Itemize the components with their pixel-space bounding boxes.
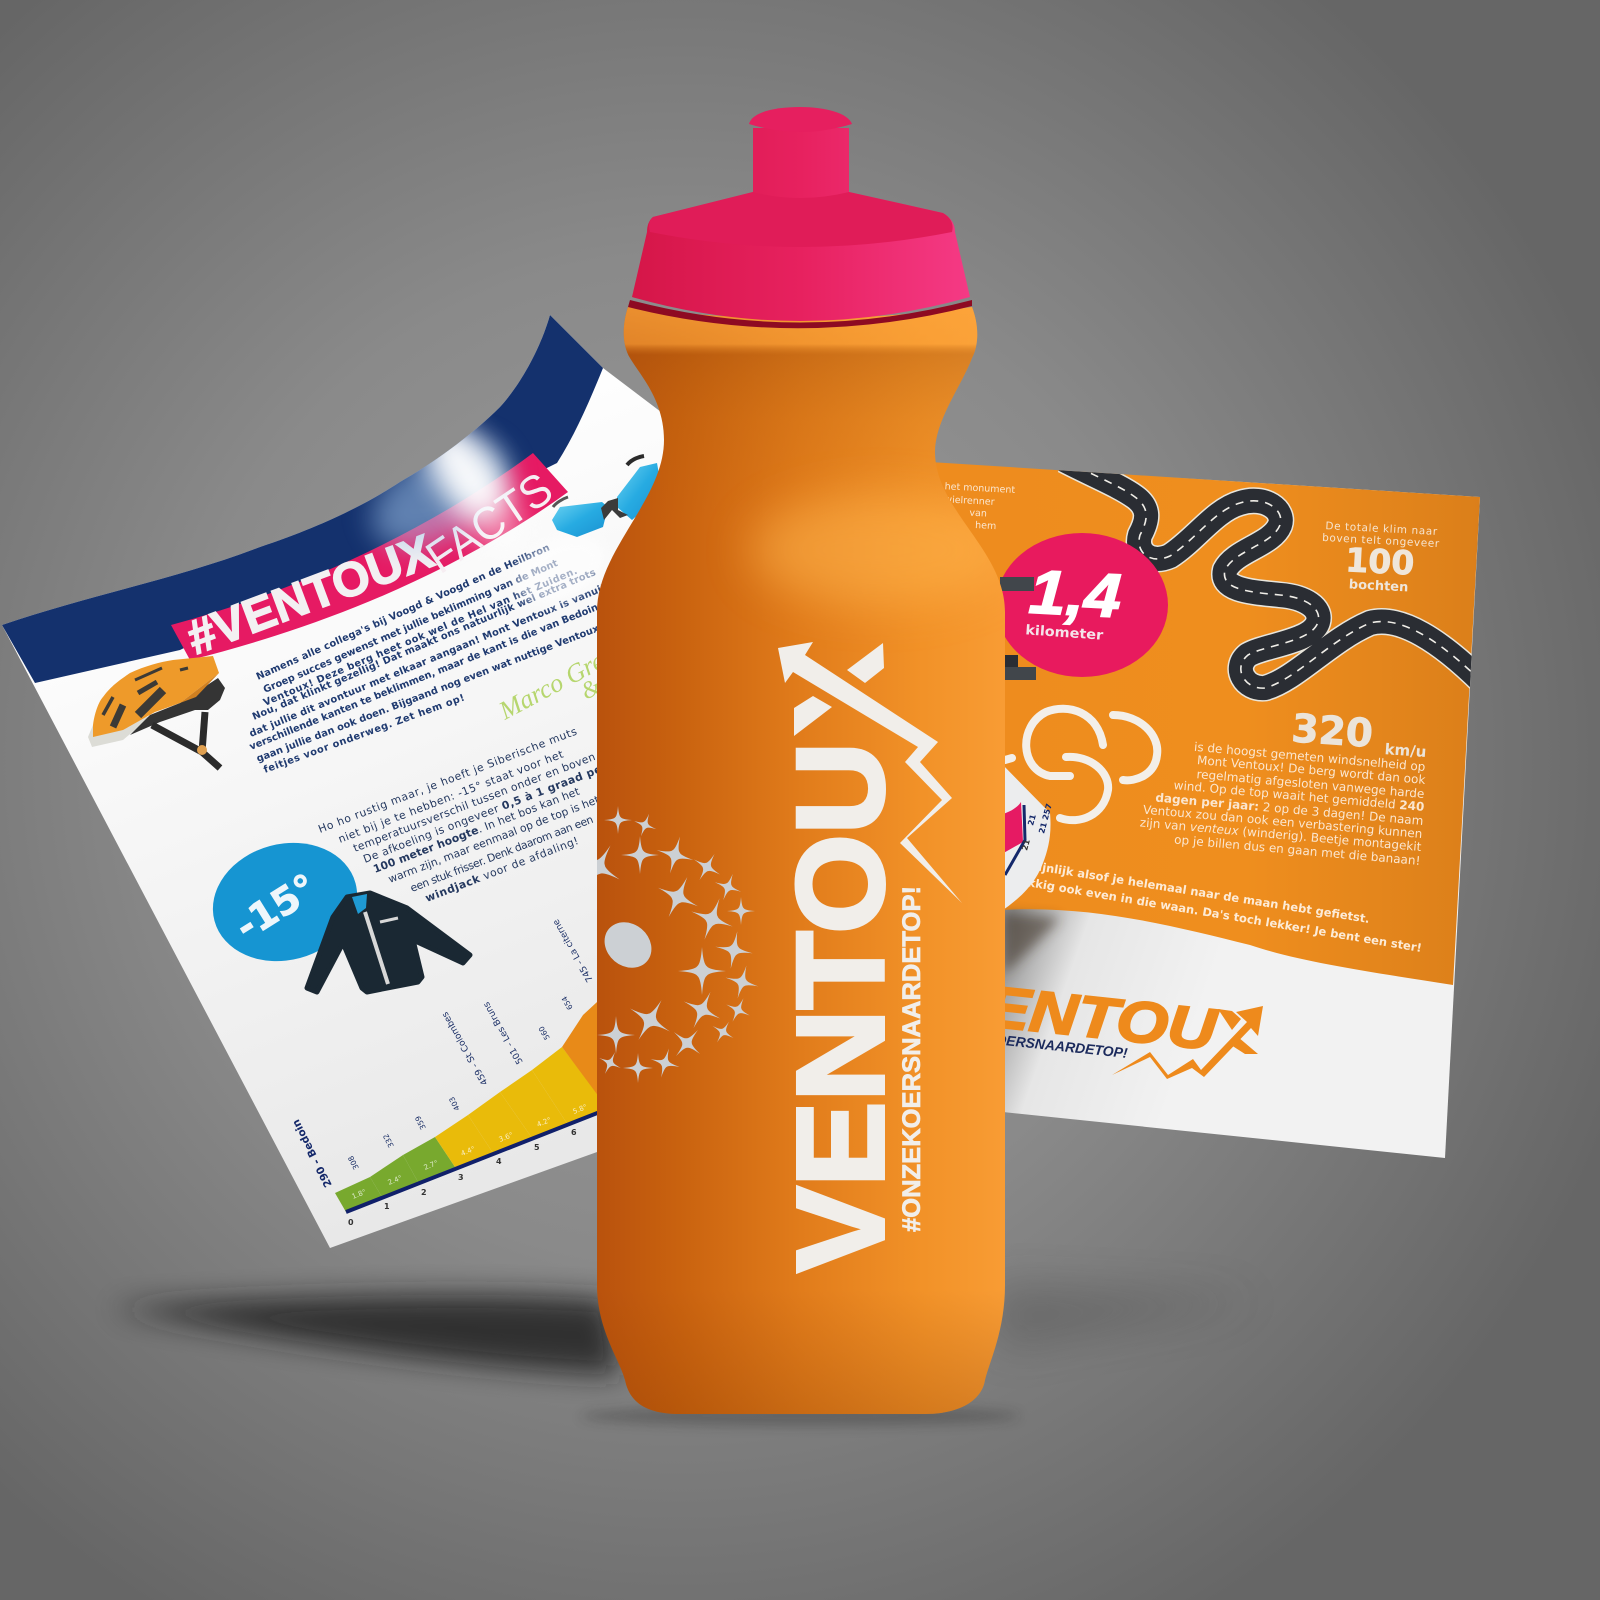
bottle shading (590, 300, 1010, 1420)
intro text: dat jullie dit avontuur met elkaar aangaan! Mont Ventoux is vanuit (248, 582, 608, 740)
ground shadow (110, 1285, 1260, 1426)
intro text: Ventoux! Deze berg heet ook wel de Hel van het Zuiden. (262, 566, 579, 709)
cap: base (632, 192, 970, 321)
closing lines: En gelukkig ook even in die waan. Da's toch lekker! Je bent een ster! (979, 867, 1423, 955)
cap: under shadow (628, 300, 972, 328)
wind speed block (1139, 706, 1427, 868)
top left text (942, 481, 1016, 533)
icon: helmet (88, 656, 225, 768)
temperature text: De afkoeling is ongeveer 0,5 à 1 graad per (361, 760, 609, 866)
navy band (2, 315, 603, 683)
wind speed block: regelmatig afgesloten vanwege harde (1196, 767, 1425, 801)
100 bochten text (1319, 520, 1441, 597)
closing lines (922, 841, 1423, 955)
elevation labels: 290 - Bedoin (290, 1117, 335, 1189)
blue circle -15°: -15° (227, 865, 325, 949)
sheet paper (2, 315, 720, 1248)
icon: wind spirals (1005, 709, 1157, 820)
orange area (930, 462, 1480, 985)
band and banner glare (358, 418, 538, 564)
chart: elevation profile: 4 (496, 1157, 502, 1166)
icon: jacket (307, 893, 470, 992)
blue circle -15° (199, 827, 371, 977)
wind speed block: 320 (1290, 706, 1374, 757)
bottle logo: X with arrow and mountain line (778, 642, 962, 903)
100 bochten text: 100 (1344, 540, 1415, 583)
chart: elevation profile: 6 (571, 1128, 577, 1137)
curled corner of sheet seen at right of bottle: 21 257 (1037, 803, 1054, 835)
chart: elevation profile: 359 (413, 1114, 428, 1131)
cap: tip (749, 107, 852, 132)
cap: top face (649, 192, 953, 247)
wind speed block: op je billen dus en gaan met die banaan! (1174, 833, 1421, 868)
intro text: Nou, dat klinkt gezellig! Dat maakt ons natuurlijk wel extra trots (251, 567, 598, 723)
100 bochten text: De totale klim naar (1325, 520, 1438, 538)
closing lines: Het voelt waarschijnlijk alsof je helemaal naar de maan hebt gefietst. (922, 841, 1371, 926)
top left text: wielrenner (944, 494, 995, 508)
chart: elevation profile: 1 (384, 1202, 390, 1211)
chart: elevation profile: 5.8° (572, 1103, 588, 1116)
heading banner: FACTS (417, 462, 562, 583)
wind speed block: Ventoux zou dan ook een verbastering kunnen (1142, 803, 1423, 841)
top left text: hem (975, 520, 997, 532)
bottle logo: VENTOU wordmark: VENTOU (773, 742, 910, 1272)
bottle (564, 107, 1010, 1420)
curled corner of sheet seen at right of bottle: 21 (1026, 813, 1038, 827)
chart: elevation profile: 4.2° (536, 1116, 552, 1129)
chart: elevation profile: 501 - Les Bruns (482, 1000, 526, 1066)
temperature text: Ho ho rustig maar, je hoeft je Siberische muts (316, 725, 579, 836)
intro text: gaan jullie dan ook doen. Bijgaand nog even wat nuttige Ventoux- (255, 622, 604, 765)
temperature text (316, 725, 609, 905)
chart: elevation profile: 2 (421, 1188, 427, 1197)
signature: & (577, 673, 606, 705)
signature: Marco Gre (493, 646, 609, 726)
chart: elevation profile: 403 (447, 1095, 462, 1112)
panel: right sheet (orange) (922, 460, 1485, 1158)
heading banner: #VENTOUX (180, 525, 441, 665)
chart: elevation profile: 2.7° (423, 1159, 439, 1172)
baseline (346, 1108, 610, 1212)
pink circle 1,4 kilometer (996, 533, 1168, 680)
pink circle 1,4 kilometer: kilometer (1025, 622, 1104, 644)
chart: elevation profile: 745 - La citerne (551, 917, 596, 984)
curled corner of sheet seen at right of bottle (1000, 762, 1054, 912)
intro text: Groep succes gewenst met jullie beklimming van de Mont (262, 558, 560, 696)
chart: elevation profile: 332 (381, 1132, 396, 1149)
shadow of curl (1003, 912, 1060, 975)
orange logo: VENTOU (939, 969, 1221, 1063)
chart: elevation profile: 2.4° (387, 1174, 403, 1187)
chart: elevation profile: 459 - St Colombes (440, 1010, 491, 1086)
top left text: het monument (944, 481, 1016, 496)
wind speed block: is de hoogst gemeten windsnelheid op (1193, 740, 1426, 774)
cap: stem (753, 128, 849, 198)
bottle tagline: #ONZEKOERSNAARDETOP! (898, 886, 926, 1232)
graphic: dandelion of stars (597, 806, 758, 1083)
chart: elevation profile: 3 (458, 1173, 464, 1182)
sheet paper (930, 462, 1480, 1158)
curled corner of sheet seen at right of bottle: 21 (1020, 838, 1032, 852)
100 bochten text: boven telt ongeveer (1322, 532, 1440, 550)
chart: elevation profile: 308 (346, 1154, 361, 1171)
orange logo (938, 969, 1263, 1079)
temperature text: warm zijn, maar eenmaal op de top is het (386, 793, 601, 886)
orange logo: #ONZEKOERSNAARDETOP! (938, 1025, 1129, 1061)
intro text: feitjes voor onderweg. Zet hem op! (262, 693, 466, 776)
segment labels: 1.8° (351, 1188, 367, 1201)
temperature text: een stuk frisser. Denk daarom aan een (408, 813, 595, 895)
top left text: van (969, 508, 987, 520)
temperature text: temperatuursverschil tussen onder en boven. (351, 749, 601, 855)
chart: elevation profile: 5 (534, 1143, 540, 1152)
bottle body (597, 307, 1005, 1414)
wind speed block: km/u (1384, 740, 1427, 761)
intro text: verschillende kanten te beklimmen, maar de kant is die van Bedoin (248, 602, 600, 753)
temperature text: 100 meter hoogte. In het bos kan het (371, 785, 581, 876)
chart: elevation profile: 560 (537, 1024, 552, 1042)
road (1064, 460, 1485, 688)
icon: sunglasses (552, 456, 660, 537)
wind speed block: dagen per jaar: 2 op de 3 dagen! De naam (1155, 791, 1424, 828)
temperature text: niet bij je te hebben: -15° staat voor het (336, 748, 565, 846)
panel: left sheet (white facts sheet) (2, 315, 1054, 1248)
intro text (248, 543, 608, 776)
chart: elevation profile (290, 917, 620, 1227)
wind speed block: Mont Ventoux! De berg wordt dan ook (1197, 753, 1426, 787)
heading banner (171, 453, 568, 665)
chart: elevation profile: 654 (560, 994, 575, 1012)
100 bochten text: bochten (1348, 577, 1409, 595)
intro text: Namens alle collega's bij Voogd & Voogd en de Heilbron (255, 543, 552, 683)
distance ticks: 0 (348, 1218, 354, 1227)
temperature text: windjack voor de afdaling! (423, 834, 580, 905)
chart: elevation profile: 4.4° (460, 1145, 476, 1158)
gradient segments (335, 1177, 382, 1212)
text fade glare (504, 523, 616, 617)
wind speed block: zijn van venteux (winderig). Beetje montagekit (1139, 815, 1422, 854)
chart: elevation profile: 3.6° (498, 1131, 514, 1144)
pink circle 1,4 kilometer: 1,4 (1027, 558, 1123, 631)
wind speed block: wind. Op de top waait het gemiddeld 240 (1173, 778, 1425, 814)
